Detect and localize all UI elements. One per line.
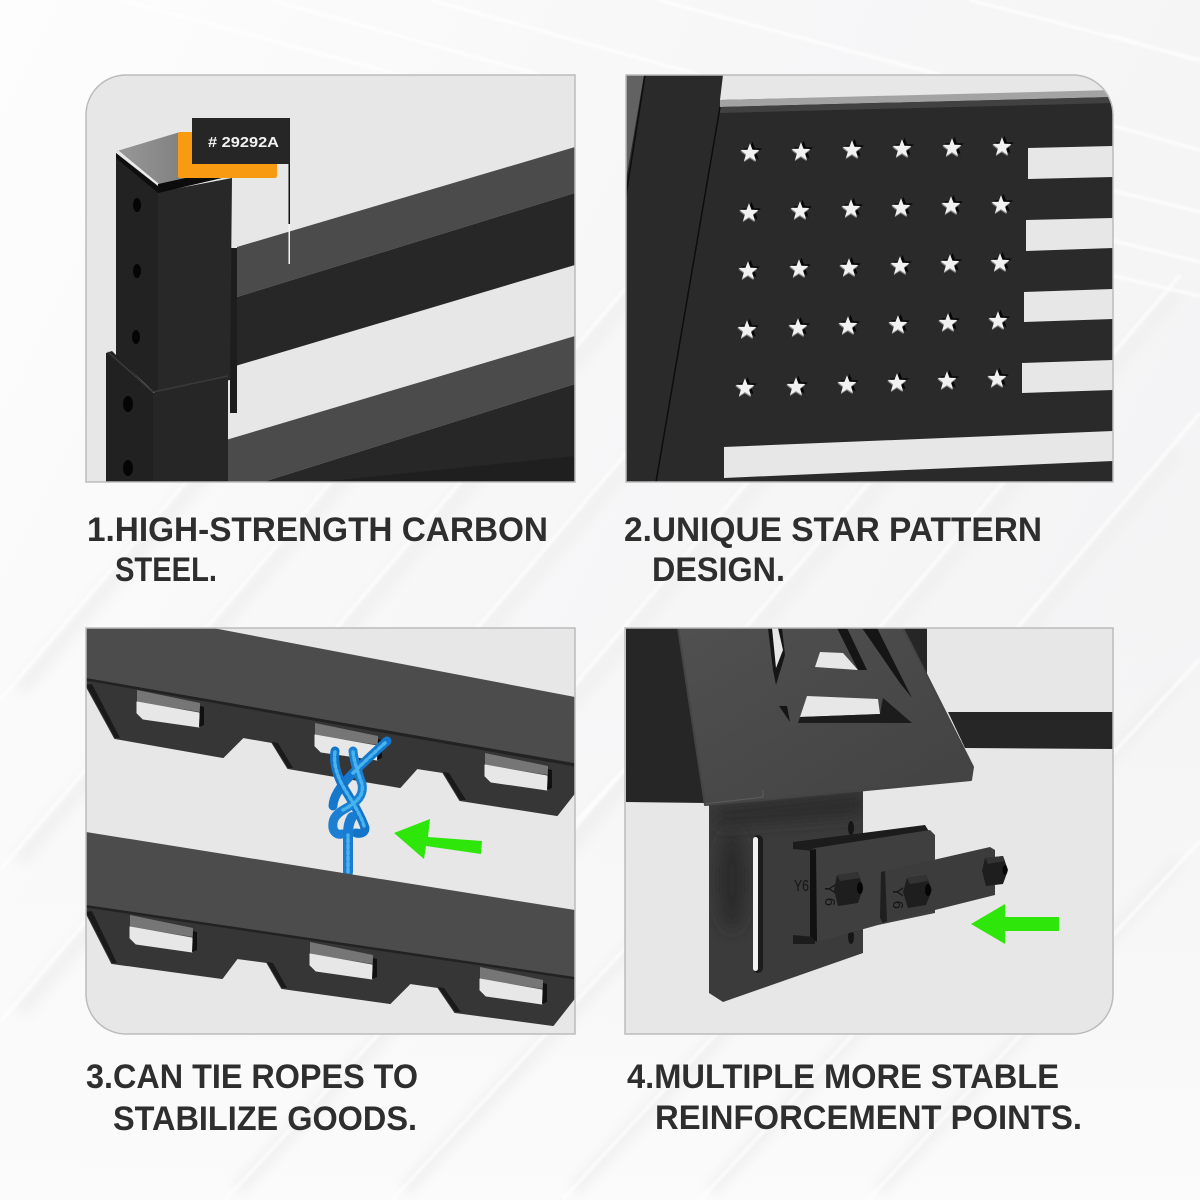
heading 3: 3.CAN TIE ROPES TO bbox=[86, 1058, 418, 1096]
heading 2 bbox=[624, 511, 1042, 589]
rear dark frame bbox=[626, 628, 1113, 803]
post: upper tube bbox=[116, 132, 232, 396]
heading 2: DESIGN. bbox=[652, 551, 785, 589]
nuts bbox=[834, 856, 1008, 908]
gusset plate with star cutouts bbox=[678, 628, 973, 805]
rope bbox=[333, 741, 387, 872]
arrow bbox=[971, 904, 1059, 944]
upper rail slots bbox=[137, 690, 552, 790]
heading 4: REINFORCEMENT POINTS. bbox=[655, 1099, 1082, 1137]
sky above panel bbox=[720, 75, 1113, 100]
side seam bbox=[626, 75, 720, 482]
heading 1: STEEL. bbox=[115, 551, 217, 589]
heading 1 bbox=[87, 511, 548, 589]
channel bracket: Y6 bbox=[794, 878, 809, 895]
rail: upper crossbar bbox=[232, 147, 575, 367]
post: lower sleeve bbox=[106, 351, 228, 482]
channel bracket: Y 6 bbox=[821, 884, 838, 906]
panel border 4 bbox=[625, 628, 1113, 1034]
upper rail face bbox=[86, 628, 575, 765]
heading 3 bbox=[86, 1058, 418, 1138]
heading 3: STABILIZE GOODS. bbox=[113, 1100, 417, 1138]
panel border 2 bbox=[626, 75, 1113, 482]
heading 4: 4.MULTIPLE MORE STABLE bbox=[627, 1058, 1059, 1096]
flag stars bbox=[735, 136, 1014, 397]
panel: star pattern flag design bbox=[626, 75, 1113, 482]
panel: high-strength carbon steel rack post bbox=[86, 75, 575, 482]
part number tag: # 29292A bbox=[208, 134, 279, 151]
part number tag bbox=[178, 118, 290, 264]
lower rail slots bbox=[130, 915, 547, 1004]
lower mounting plate bbox=[709, 790, 863, 1002]
flag stripes bbox=[724, 146, 1113, 478]
panel: rope tie points bbox=[86, 628, 575, 1034]
sliding bar bbox=[880, 847, 995, 923]
lower rail face bbox=[86, 832, 575, 978]
sliding bar: Y 6 bbox=[889, 887, 906, 909]
heading 1: 1.HIGH-STRENGTH CARBON bbox=[87, 511, 548, 549]
panel border 3 bbox=[86, 628, 575, 1034]
panel: reinforcement points bbox=[625, 628, 1113, 1034]
channel bracket bbox=[793, 825, 935, 944]
panel border 1 bbox=[86, 75, 575, 482]
rail: lower crossbar bbox=[226, 336, 575, 482]
upper rail flange bbox=[86, 675, 575, 815]
arrow bbox=[394, 819, 482, 859]
bracket plate bbox=[230, 248, 237, 413]
heading 4 bbox=[627, 1058, 1082, 1137]
lower rail flange bbox=[86, 900, 575, 1025]
heading 2: 2.UNIQUE STAR PATTERN bbox=[624, 511, 1042, 549]
